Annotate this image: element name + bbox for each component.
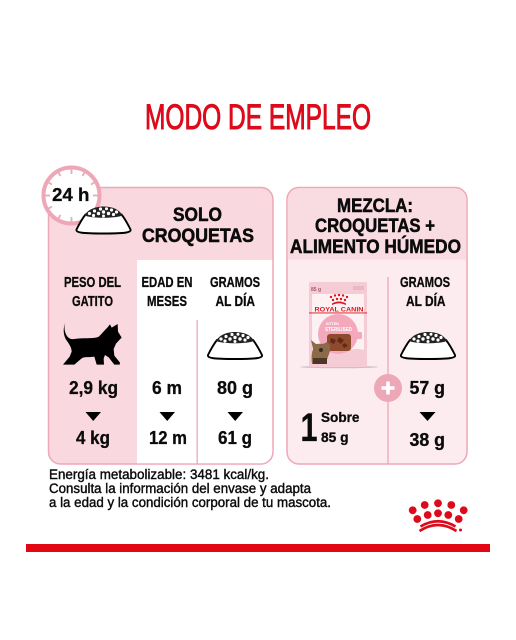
quantity: 1 sobre: Sobre	[321, 409, 360, 425]
icon: kitten	[63, 322, 122, 365]
column: gramos al dia	[208, 275, 262, 448]
kitten photo	[311, 340, 330, 364]
heading: mezcla: ALIMENTO HÚMEDO	[290, 234, 461, 258]
column: peso del gatito: GATITO	[72, 294, 113, 310]
column: gramos al dia: 38 g	[410, 430, 445, 450]
divider	[387, 277, 389, 464]
product pouch	[300, 282, 378, 368]
icon: bowl	[76, 206, 131, 234]
column: edad en meses: EDAD EN	[142, 275, 192, 291]
column: gramos al dia	[400, 275, 455, 450]
footnote: Consulta la información del envase y adapta	[49, 481, 311, 496]
column: peso del gatito: PESO DEL	[64, 275, 121, 291]
clock icon	[44, 168, 100, 224]
arrow	[228, 412, 243, 421]
heading: solo croquetas: CROQUETAS	[142, 225, 254, 247]
column: gramos al dia: 57 g	[410, 378, 445, 398]
icon: bowl	[401, 332, 455, 359]
quantity: 1 sobre: 85 g	[321, 429, 348, 445]
quantity: 1 sobre	[300, 406, 360, 450]
column: gramos al dia: AL DÍA	[216, 293, 255, 310]
panel: solo croquetas	[44, 168, 273, 464]
product pouch: ROYAL CANIN	[314, 306, 364, 314]
title: MODO DE EMPLEO	[145, 98, 371, 137]
product pouch: 85 g	[311, 287, 321, 293]
footnote: Energía metabolizable: 3481 kcal/kg.	[49, 467, 269, 482]
logo: royal canin crown	[409, 499, 468, 532]
header band	[288, 188, 466, 260]
product pouch: KITTEN	[326, 322, 339, 326]
panel: mezcla	[287, 188, 467, 464]
footnote	[49, 467, 331, 510]
divider	[196, 320, 198, 464]
clock icon: 24 h	[52, 184, 90, 205]
heading: mezcla: MEZCLA:	[337, 195, 413, 217]
product pouch: STERILISED	[325, 327, 352, 333]
icon: bowl	[208, 332, 262, 359]
values: 4 kg	[76, 428, 110, 448]
quantity: 1 sobre: 1	[300, 406, 318, 450]
column: edad en meses: 12 m	[149, 428, 187, 448]
arrow	[86, 412, 101, 421]
column: gramos al dia: GRAMOS	[210, 275, 260, 291]
values	[69, 378, 118, 448]
red bar	[26, 544, 490, 552]
heading: mezcla	[290, 195, 461, 258]
heading: mezcla: CROQUETAS +	[315, 215, 435, 237]
column: gramos al dia: 80 g	[217, 378, 253, 398]
icon: plus	[374, 374, 402, 402]
column: gramos al dia: AL DÍA	[406, 293, 446, 310]
column: edad en meses: 6 m	[152, 378, 182, 398]
column: edad en meses: MESES	[147, 294, 187, 310]
column: gramos al dia: 61 g	[218, 428, 252, 448]
column: peso del gatito	[63, 275, 122, 448]
arrow	[160, 412, 175, 421]
footnote: a la edad y la condición corporal de tu mascota.	[49, 495, 331, 510]
white table area	[137, 260, 272, 463]
column: gramos al dia: GRAMOS	[400, 275, 450, 291]
column: edad en meses	[142, 275, 192, 448]
values: 2,9 kg	[69, 378, 118, 398]
heading: solo croquetas: SOLO	[173, 204, 222, 226]
arrow	[420, 412, 436, 421]
heading: solo croquetas	[142, 204, 254, 247]
